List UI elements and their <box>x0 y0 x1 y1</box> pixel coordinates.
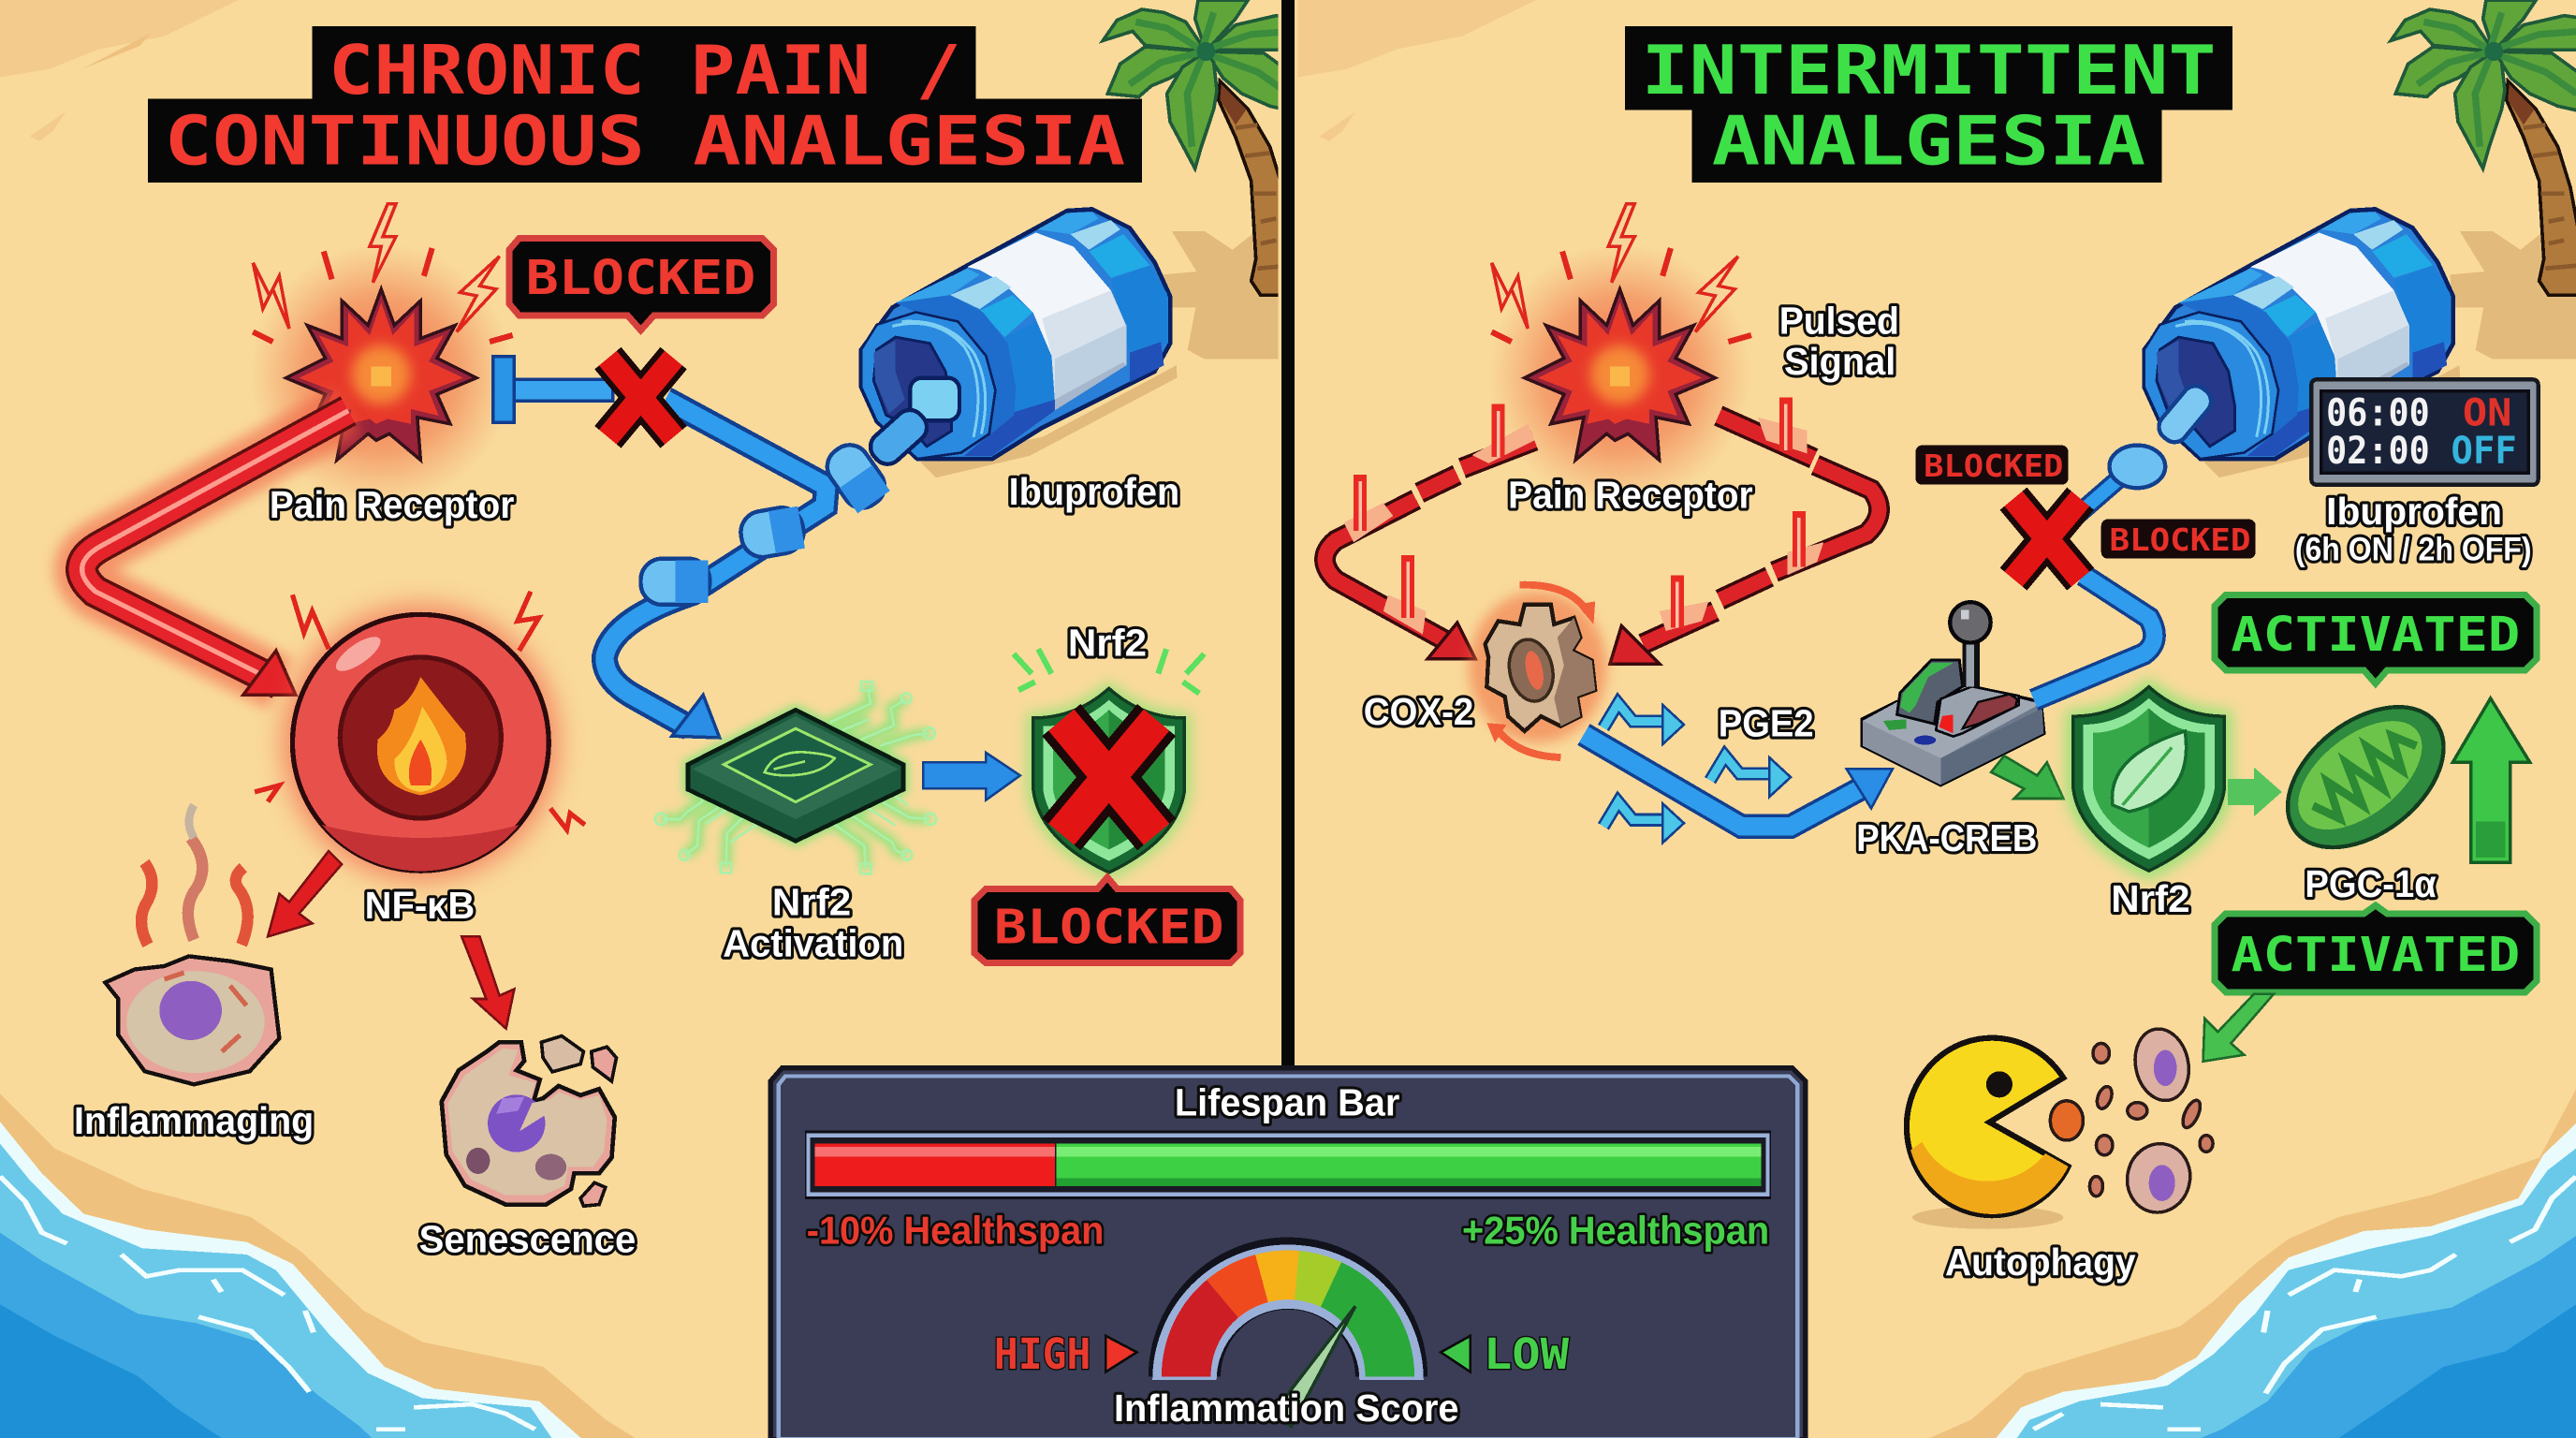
callout: blocked: BLOCKED <box>526 251 755 306</box>
arrow: Nrf2 to mitochondrion <box>2228 768 2282 816</box>
arrow: pulsed signal left <box>1325 440 1534 659</box>
panel: chronic pain / continuous analgesia <box>74 0 1298 1260</box>
arrows: NF-kB outputs <box>268 851 514 1029</box>
icon: senescent cell <box>442 1036 616 1206</box>
panel: timer: OFF <box>2452 429 2517 473</box>
label: pain receptor: Pain Receptor <box>270 483 515 526</box>
callout: activated <box>2215 594 2537 683</box>
chart: lifespan bar <box>805 1130 1771 1199</box>
label: autophagy: Autophagy <box>1945 1240 2136 1284</box>
ocean: bottom left corner <box>0 1093 636 1438</box>
sand patches <box>0 0 1536 141</box>
label: NF-kB: NF-κB <box>365 884 475 927</box>
label: Nrf2 activation <box>723 881 903 964</box>
label: pulsed signal: Pulsed <box>1779 299 1899 342</box>
icon: Nrf2 shield <box>2066 678 2232 880</box>
label: inflammation score: Inflammation Score <box>1114 1387 1459 1430</box>
label: Nrf2: Nrf2 <box>1068 621 1147 664</box>
icon: cell debris <box>2050 1024 2213 1219</box>
label: PGC-1a: PGC-1α <box>2305 862 2437 905</box>
icon: pain receptor burst <box>250 204 513 506</box>
arrow: ibuprofen pill stream <box>605 399 892 738</box>
title: INTERMITTENT <box>1641 31 2217 110</box>
palm shadow <box>1163 231 1279 360</box>
chart: inflammation gauge <box>1184 1273 1392 1426</box>
tag: blocked: BLOCKED <box>2110 521 2250 558</box>
icon: red x <box>2013 499 2081 580</box>
icon: pulse spikes <box>1344 398 1823 634</box>
label: pain receptor: Pain Receptor <box>1508 473 1753 516</box>
arrow: ibuprofen to switch <box>2034 446 2165 700</box>
label: +25% healthspan: +25% Healthspan <box>1462 1209 1769 1253</box>
label: pulsed signal <box>1779 299 1899 383</box>
icon: pills in bottle mouth <box>865 378 959 470</box>
ocean: bottom right corner <box>1929 1089 2576 1438</box>
label: ibuprofen schedule: (6h ON / 2h OFF) <box>2295 531 2532 567</box>
label: ibuprofen schedule <box>2295 490 2532 567</box>
label: low: LOW <box>1484 1329 1570 1379</box>
label: lifespan bar: Lifespan Bar <box>1175 1081 1400 1124</box>
icon: ibuprofen bottle <box>2144 209 2460 477</box>
icon: NF-kB inflamed cell <box>255 592 585 881</box>
panel: timer: 02:00 <box>2326 429 2430 473</box>
arrow: pulsed signal right <box>1610 416 1880 664</box>
divider <box>1281 0 1295 1071</box>
icon: smoke <box>141 805 248 945</box>
panel: lifespan bar and inflammation gauge <box>770 1068 1806 1438</box>
icon: inflammaging cell <box>105 956 279 1084</box>
icon: mitochondrion <box>2261 679 2470 875</box>
palm shadow <box>2451 231 2576 359</box>
label: senescence: Senescence <box>419 1217 636 1260</box>
title: CONTINUOUS ANALGESIA <box>165 102 1125 181</box>
label: pulsed signal: Signal <box>1784 340 1895 383</box>
label: COX-2: COX-2 <box>1364 690 1473 733</box>
label: low <box>1441 1329 1570 1379</box>
label: Nrf2: Nrf2 <box>2111 877 2190 920</box>
icon: pain receptor burst <box>1488 204 1751 506</box>
callout: blocked on Nrf2: BLOCKED <box>994 900 1224 955</box>
panel: timer: 06:00 <box>2326 391 2430 435</box>
arrow: red pain signal <box>82 411 348 695</box>
icon: pacman autophagy <box>1907 1038 2069 1229</box>
icon: PGE2 squiggle arrows <box>1603 703 1791 843</box>
label: PKA-CREB: PKA-CREB <box>1856 816 2037 859</box>
callout: activated <box>2215 905 2537 992</box>
title: ANALGESIA <box>1712 102 2145 181</box>
arrow: activated to autophagy <box>2203 994 2274 1062</box>
callout: activated: ACTIVATED <box>2231 608 2520 663</box>
icon: red x <box>607 359 674 437</box>
icon: COX-2 gear <box>1469 585 1606 757</box>
title <box>1625 26 2232 183</box>
icon: palm tree <box>2391 0 2576 295</box>
arrow: switch to Nrf2 <box>1991 756 2063 799</box>
label: Nrf2 activation: Activation <box>723 921 903 964</box>
label: Nrf2 activation: Nrf2 <box>772 881 851 924</box>
callout: blocked <box>509 238 774 330</box>
icon: blocked Nrf2 shield <box>1014 649 1204 880</box>
panel: intermittent analgesia <box>1325 0 2576 1284</box>
icon: pill in bottle mouth <box>2154 381 2217 448</box>
icon: inhibitor bar <box>493 357 613 422</box>
icon: ibuprofen bottle <box>861 209 1178 477</box>
label: high: HIGH <box>994 1329 1090 1379</box>
label: -10% healthspan: -10% Healthspan <box>807 1209 1104 1253</box>
label: ibuprofen: Ibuprofen <box>1009 470 1179 513</box>
panel: timer <box>2311 379 2539 485</box>
arrow: up <box>2452 698 2530 862</box>
callout: blocked on Nrf2 <box>974 877 1240 962</box>
label: inflammaging: Inflammaging <box>74 1099 314 1142</box>
callout: activated: ACTIVATED <box>2231 928 2520 983</box>
arrow: blue to shield <box>923 753 1020 800</box>
arrow: blue PGE2 path <box>1584 734 1893 827</box>
label: PGE2: PGE2 <box>1719 701 1814 744</box>
icon: Nrf2 chip <box>655 682 936 873</box>
panel: timer: ON <box>2463 391 2511 435</box>
title: CHRONIC PAIN / <box>329 31 961 110</box>
title <box>148 26 1142 183</box>
icon: PKA-CREB switch <box>1863 602 2043 785</box>
tag: blocked: BLOCKED <box>1924 448 2063 484</box>
icon: palm tree <box>1103 0 1298 295</box>
label: ibuprofen schedule: Ibuprofen <box>2326 490 2502 533</box>
